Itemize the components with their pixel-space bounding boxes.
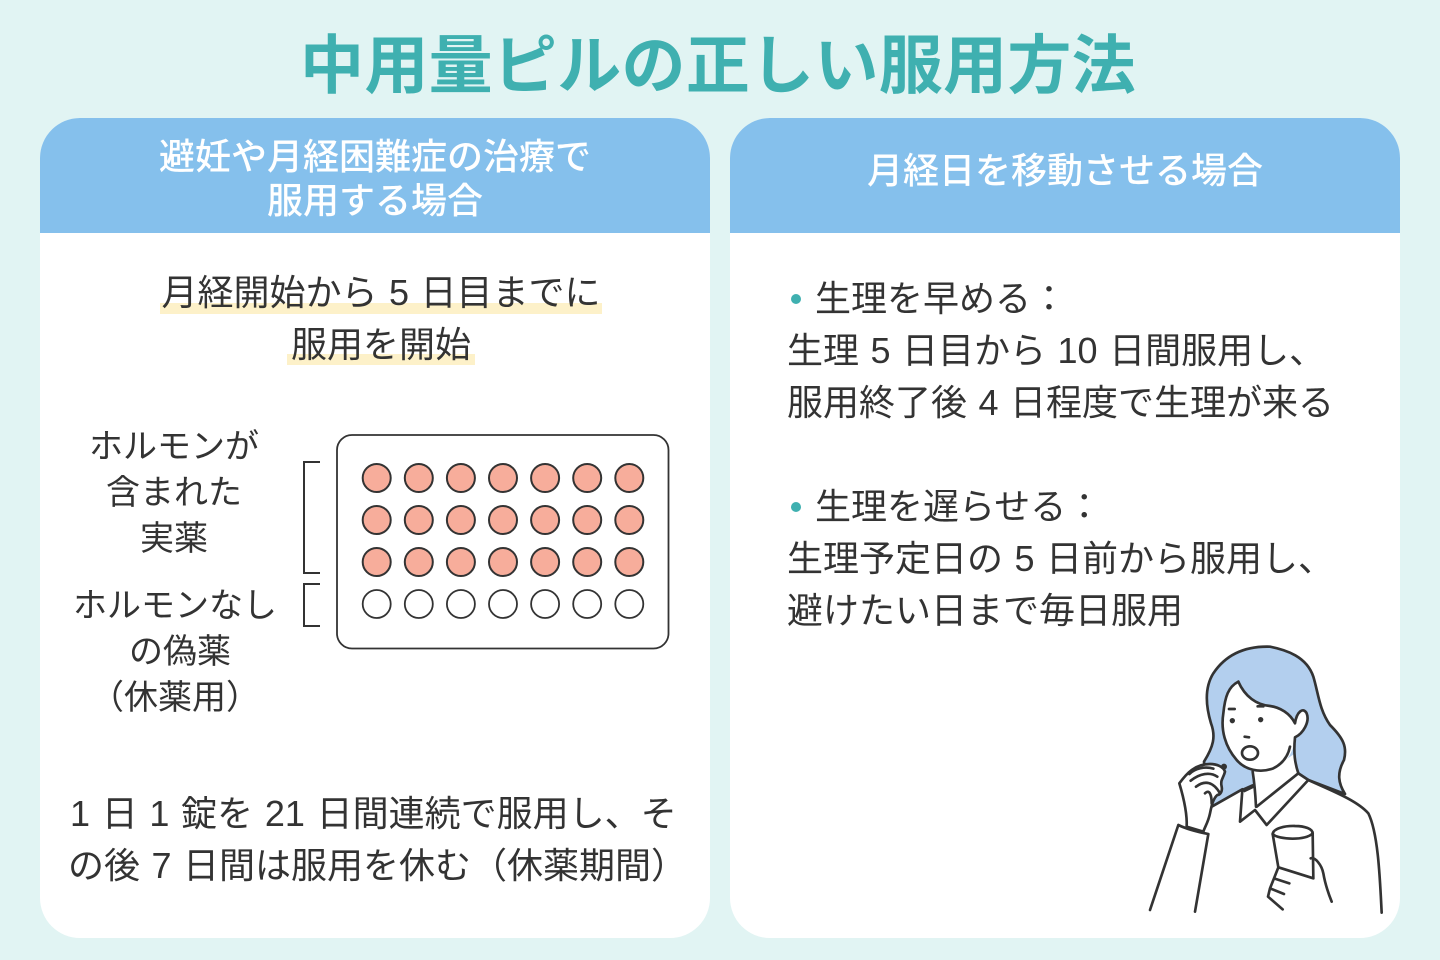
active pills rows — [363, 464, 643, 576]
hand with pill — [1179, 764, 1225, 832]
text: bring forward line 2: 服用終了後 4 日程度で生理が来る — [787, 382, 1334, 423]
neck line — [1253, 772, 1256, 807]
pill in fingers — [1222, 765, 1226, 768]
label: active pills — [89, 428, 259, 558]
heading: delay: 生理を遅らせる： — [815, 486, 1102, 527]
description line 1: 1 日 1 錠を 21 日間連続で服用し、そ — [70, 793, 677, 834]
key message line 1: 月経開始から 5 日目までに — [161, 272, 601, 313]
placebo pills row — [363, 590, 643, 618]
neck — [1253, 753, 1298, 807]
pill sheet outline — [337, 435, 668, 648]
title: 中用量ピルの正しい服用方法 — [300, 30, 1136, 102]
panel: shifting period date — [730, 118, 1400, 938]
nose — [1245, 733, 1249, 741]
header line 2: 服用する場合 — [267, 180, 483, 221]
hand holding cup — [1268, 858, 1332, 909]
label: placebo pills: の偽薬 — [129, 633, 231, 671]
bullet: delay — [791, 502, 801, 512]
panel header: treatment use — [40, 118, 710, 233]
body — [1150, 773, 1382, 913]
bracket: active pills — [304, 462, 320, 573]
fingers — [1189, 768, 1220, 803]
cup — [1273, 826, 1313, 878]
right shoulder and arm — [1308, 780, 1382, 913]
text: delay line 1: 生理予定日の 5 日前から服用し、 — [787, 538, 1334, 579]
header line 1: 避妊や月経困難症の治療で — [159, 136, 591, 177]
label: active pills: ホルモンが — [89, 428, 259, 466]
hair — [1204, 647, 1345, 807]
highlight line 1 — [160, 303, 602, 314]
panel header: shifting period — [730, 118, 1400, 233]
left shoulder — [1212, 789, 1242, 807]
sleeve — [1150, 825, 1208, 912]
label: active pills: 実薬 — [140, 520, 208, 558]
panel: treatment use — [40, 118, 710, 938]
bullet: bring forward — [791, 294, 801, 304]
highlight line 2 — [287, 354, 475, 365]
eyebrows — [1229, 706, 1263, 709]
label: placebo pills: （休薬用） — [90, 679, 260, 717]
eyes — [1230, 717, 1263, 723]
text: bring forward line 1: 生理 5 日目から 10 日間服用し、 — [787, 330, 1325, 371]
face outline — [1223, 682, 1290, 771]
hairline and ear — [1238, 682, 1308, 773]
shirt collar — [1240, 773, 1308, 825]
heading: bring forward: 生理を早める： — [815, 278, 1067, 319]
illustration: woman taking a pill with a cup — [1148, 645, 1383, 914]
header text: 月経日を移動させる場合 — [867, 150, 1263, 191]
cup rim — [1273, 833, 1313, 839]
label: active pills: 含まれた — [106, 474, 242, 512]
label: placebo pills: ホルモンなし — [73, 587, 277, 625]
face — [1223, 682, 1308, 771]
mouth — [1242, 746, 1258, 760]
text: delay line 2: 避けたい日まで毎日服用 — [787, 590, 1183, 631]
key message line 2: 服用を開始 — [291, 324, 471, 365]
description line 2: の後 7 日間は服用を休む（休薬期間） — [68, 845, 687, 886]
bracket: placebo pills — [304, 584, 320, 626]
label: placebo pills — [73, 587, 277, 717]
